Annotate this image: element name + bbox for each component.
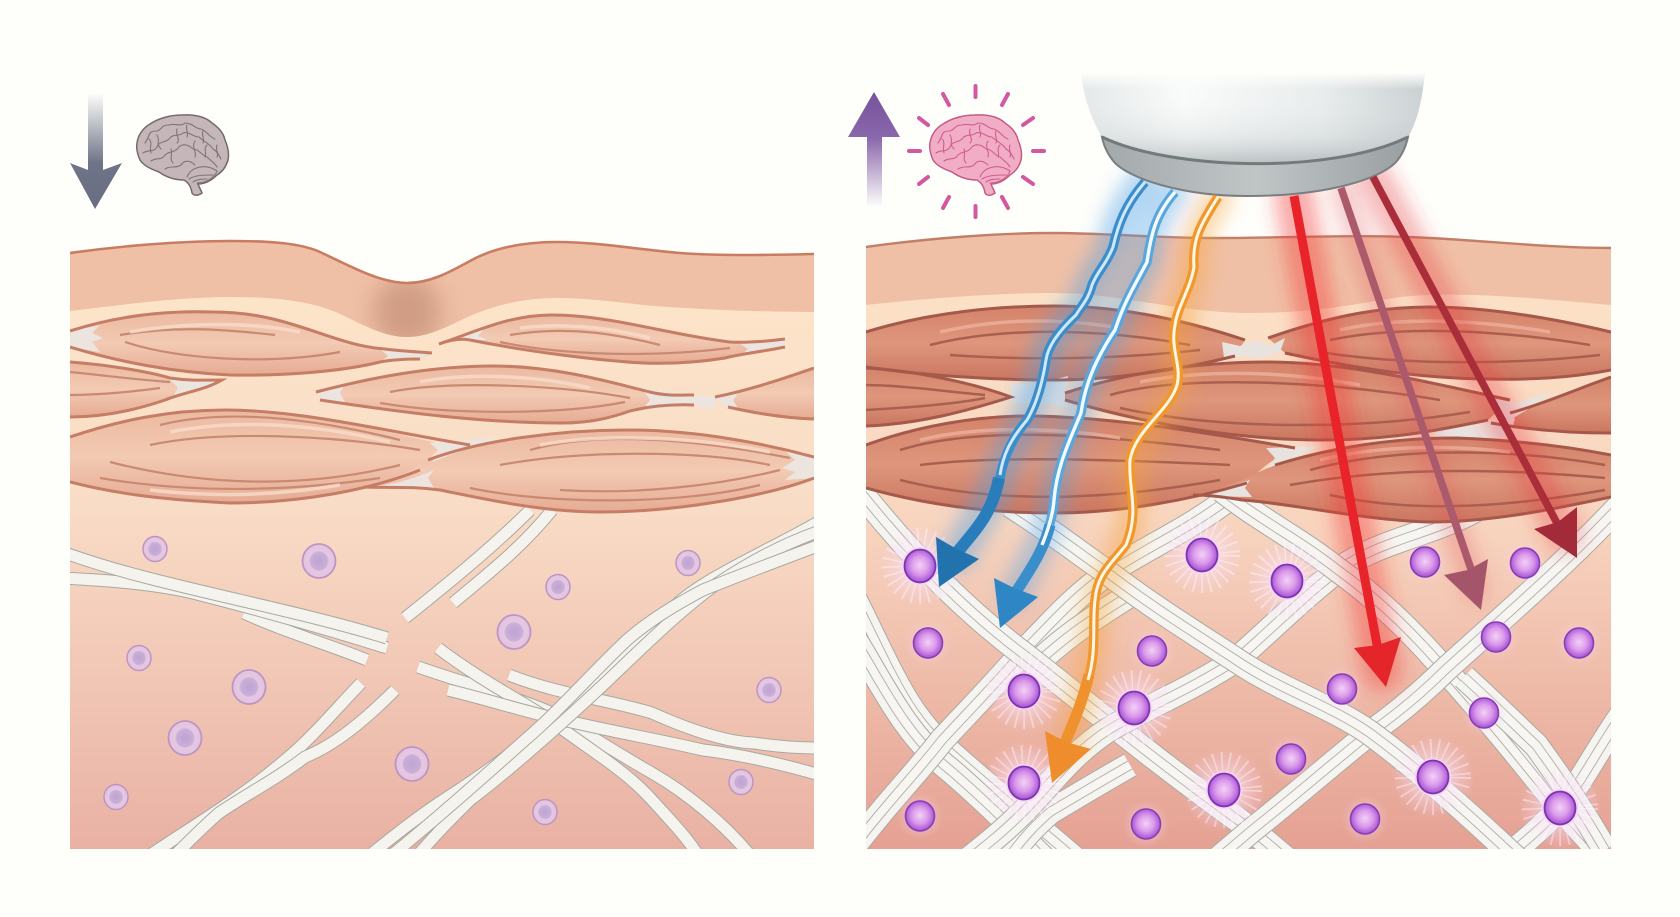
blue solid shaft 1 xyxy=(955,478,999,555)
blue core line 2 xyxy=(1042,192,1175,545)
up arrow xyxy=(848,92,900,207)
light glow around beams xyxy=(958,177,1565,740)
icon: bright pink brain with rays xyxy=(909,86,1044,217)
dull fibroblast cells xyxy=(104,536,781,824)
red straight beam xyxy=(1294,196,1401,687)
toned muscle fibres xyxy=(866,306,1611,522)
epidermis layer, right xyxy=(866,233,1611,313)
dark red straight beam xyxy=(1373,177,1577,558)
red arrowhead xyxy=(1354,637,1401,687)
blue arrowhead 2 xyxy=(994,578,1038,628)
mauve straight beam xyxy=(1341,188,1488,610)
slack muscle fibres xyxy=(70,312,814,512)
probe body xyxy=(1081,73,1425,164)
woven collagen lattice xyxy=(855,485,1625,870)
blue arrowhead 1 xyxy=(936,537,979,587)
orange arrowhead xyxy=(1045,731,1091,783)
probe rim xyxy=(1102,137,1408,196)
blue solid shaft 2 xyxy=(1014,525,1050,595)
dermis-epidermis layer with wrinkle xyxy=(70,241,814,348)
dermis background xyxy=(70,290,814,849)
blue core line 1 xyxy=(1000,182,1145,475)
orange solid shaft xyxy=(1060,675,1089,755)
probe rim seam xyxy=(1102,137,1408,164)
device probe head xyxy=(1081,73,1425,196)
blue wavy beam 2 xyxy=(994,192,1175,628)
torn collagen fibres xyxy=(60,510,820,855)
pink brain xyxy=(930,115,1022,195)
icon: dull grey brain xyxy=(137,115,229,195)
panel: right, stimulated tissue xyxy=(866,293,1611,849)
orange wavy beam xyxy=(1045,197,1218,783)
dermis background xyxy=(866,250,1611,849)
orange core line xyxy=(1088,197,1218,680)
mauve arrowhead xyxy=(1444,559,1488,610)
skin surface line, right xyxy=(866,233,1611,248)
activated glowing fibroblast cells xyxy=(878,513,1603,850)
panel: left, low-stimulation tissue xyxy=(60,241,820,855)
probe shading xyxy=(1081,73,1425,164)
down arrow xyxy=(70,93,122,209)
dark red arrowhead xyxy=(1534,507,1577,558)
radiating activity rays xyxy=(909,86,1044,217)
blue wavy beam 1 xyxy=(936,182,1145,587)
